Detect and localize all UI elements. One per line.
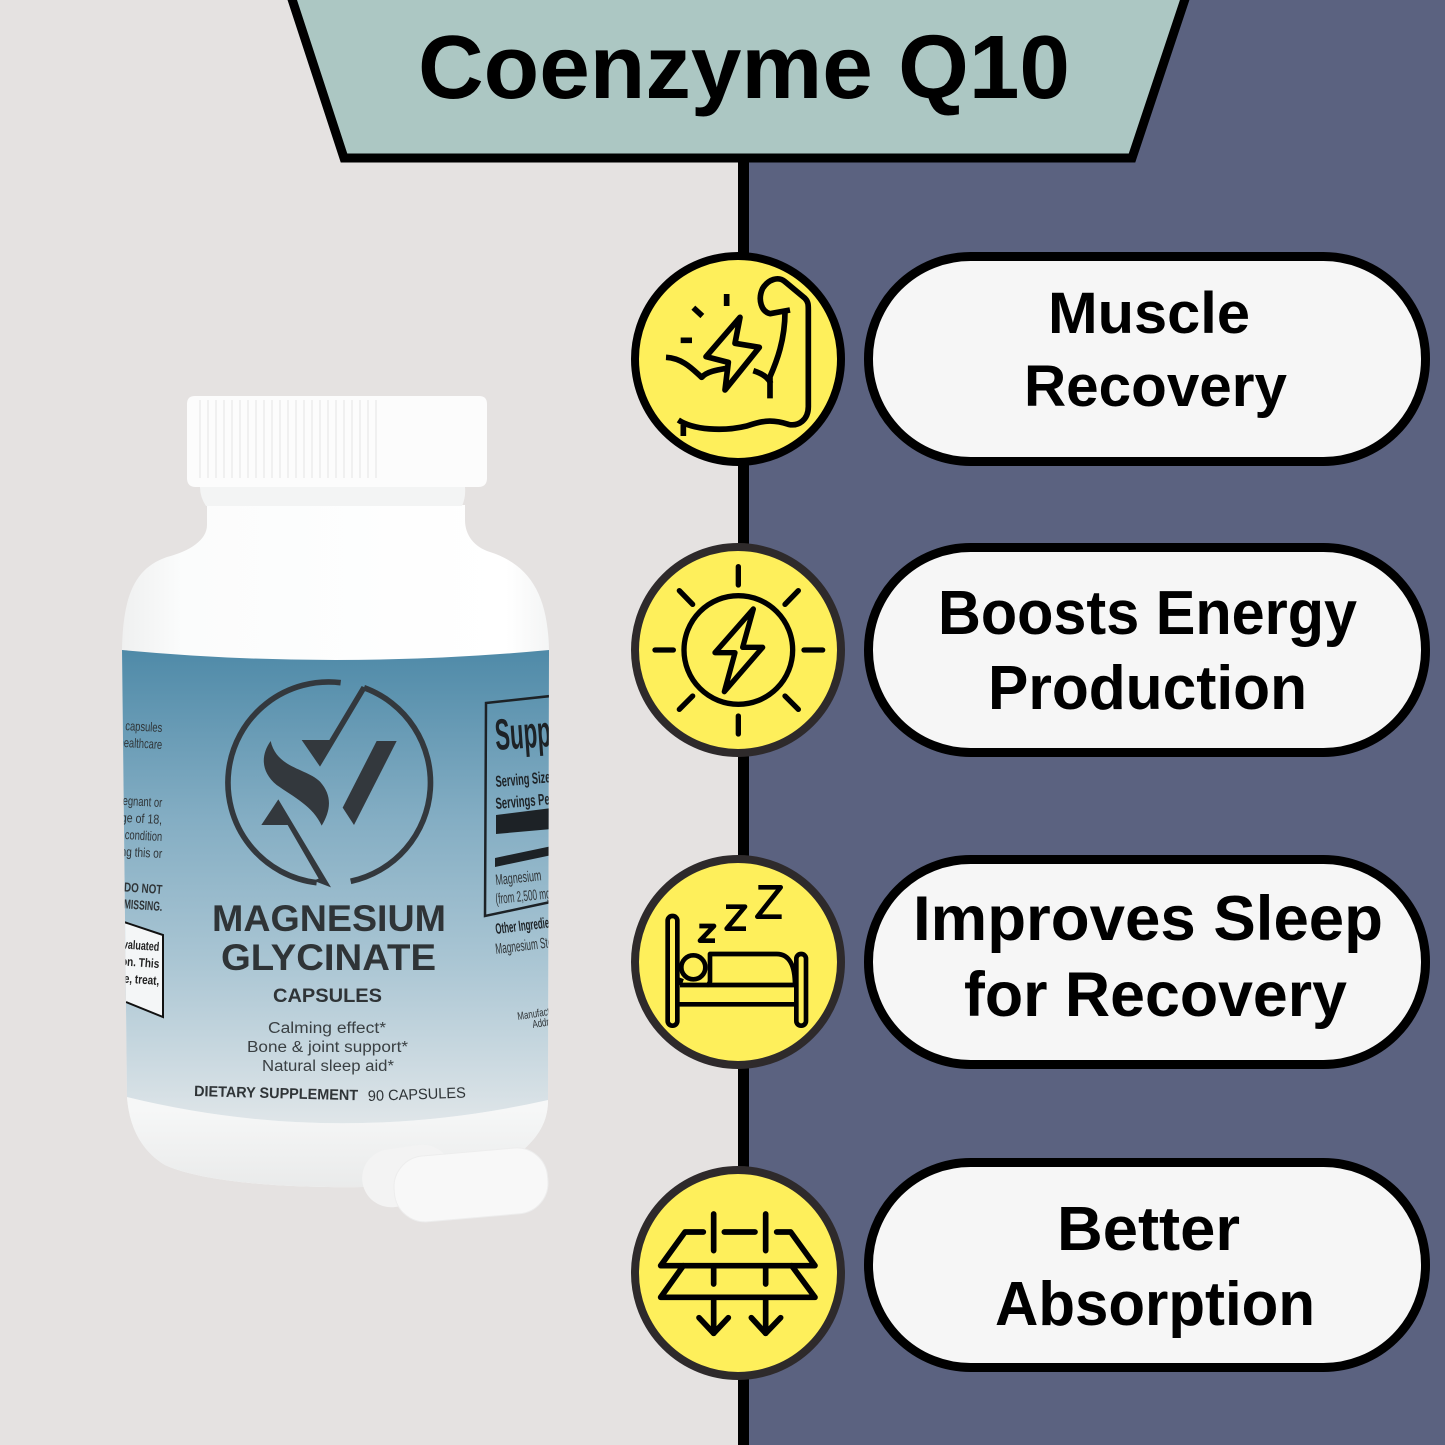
- product benefits: [247, 1020, 408, 1075]
- cap ribs: [200, 400, 376, 478]
- benefit pill: muscle recovery: Muscle: [1048, 281, 1250, 346]
- supplement facts panel: [484, 694, 549, 1028]
- benefit pill: sleep: Improves Sleep: [913, 884, 1383, 954]
- product descriptor: 90 CAPSULES: [368, 1085, 466, 1105]
- benefit pill: absorption: Better: [1057, 1195, 1240, 1264]
- right background: [749, 0, 1445, 1445]
- benefit pill: sleep: for Recovery: [964, 960, 1347, 1030]
- FDA disclaimer box: ose, treat,: [112, 972, 160, 988]
- left side directions text: al condition: [115, 828, 163, 844]
- icon: absorption layers with arrows: [635, 1170, 841, 1376]
- benefit pill: muscle recovery: Recovery: [1024, 354, 1287, 419]
- benefit pill: energy production: Boosts Energy: [938, 579, 1357, 648]
- title banner: [289, 0, 1188, 158]
- icon: sleeping person in bed: [635, 859, 841, 1065]
- benefit pill: absorption: [868, 1162, 1426, 1368]
- supplement facts panel: Address: [532, 1014, 562, 1031]
- bottle label: [122, 650, 549, 1124]
- bottle base shade: [127, 1097, 548, 1187]
- left side directions text: r healthcare: [113, 736, 163, 752]
- benefit pill: sleep: [868, 860, 1426, 1064]
- product name: MAGNESIUM: [212, 898, 446, 939]
- icon: sun with energy bolt: [635, 547, 841, 753]
- capsules: [358, 1141, 551, 1224]
- supplement facts panel: Other Ingredients: [494, 913, 562, 938]
- icon: muscle with lightning bolt: [635, 256, 841, 462]
- bottle neck band: [200, 487, 465, 506]
- bottle body: [122, 505, 549, 1187]
- left side directions text: e age of 18,: [106, 809, 163, 827]
- supplement facts panel: Suppl: [493, 707, 559, 760]
- left side directions text: EN, DO NOT: [104, 880, 163, 897]
- left side directions text: (20) capsules: [106, 719, 163, 735]
- title: Coenzyme Q10: [418, 18, 1070, 118]
- supplement facts panel: Servings Per: [495, 791, 554, 813]
- supplement facts panel: Manufactured: [517, 1003, 566, 1023]
- supplement facts panel: (from 2,500 mg): [495, 885, 554, 908]
- bottle cap: [187, 396, 487, 487]
- FDA disclaimer box: ation. This: [109, 955, 160, 971]
- benefit pill: energy production: [868, 548, 1426, 752]
- product benefits: Natural sleep aid*: [262, 1058, 394, 1075]
- product benefits: Bone & joint support*: [247, 1039, 408, 1056]
- left side directions text: ising this or: [111, 844, 163, 861]
- benefit pill: muscle recovery: [868, 256, 1426, 462]
- benefit pill: energy production: Production: [988, 654, 1307, 723]
- product: supplement bottle: [104, 396, 572, 1224]
- central vertical line: [738, 150, 749, 1445]
- product name: [212, 898, 446, 1007]
- supplement facts panel: Serving Size:: [495, 769, 554, 791]
- left background: [0, 0, 749, 1445]
- FDA disclaimer box: t evaluated: [112, 937, 160, 954]
- brand logo: [228, 682, 430, 887]
- FDA disclaimer box: [125, 921, 164, 1018]
- left side directions text: e Pregnant or: [105, 794, 163, 810]
- benefit pill: absorption: Absorption: [995, 1270, 1315, 1339]
- product descriptor: [194, 1083, 466, 1105]
- supplement facts panel: Magnesium Stearate: [494, 932, 572, 958]
- product benefits: Calming effect*: [268, 1020, 386, 1037]
- product name: CAPSULES: [273, 985, 382, 1007]
- left side directions text: [123, 722, 162, 911]
- product descriptor: DIETARY SUPPLEMENT: [194, 1083, 358, 1104]
- supplement facts panel: Magnesium: [495, 867, 542, 889]
- left side directions text: OR MISSING.: [108, 897, 163, 915]
- product name: GLYCINATE: [221, 937, 436, 978]
